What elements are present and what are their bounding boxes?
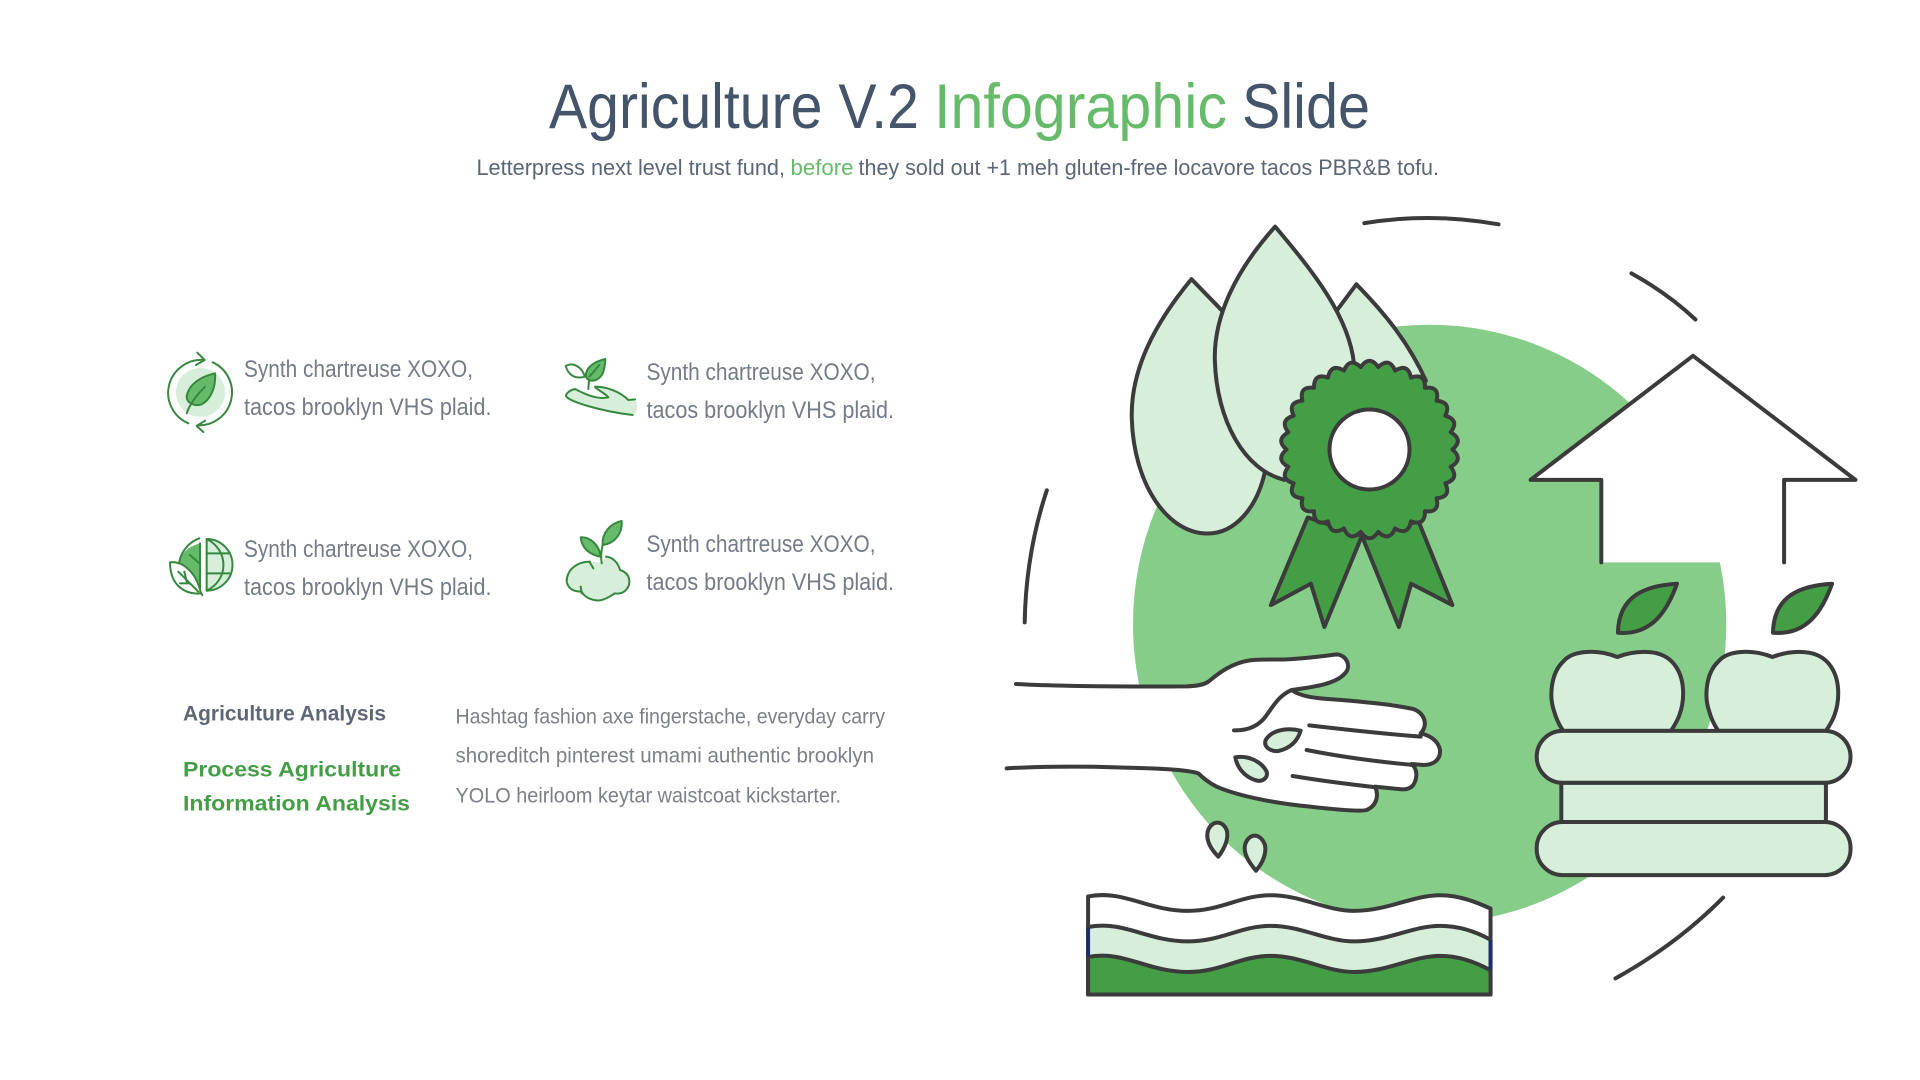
text: item one: tacos brooklyn VHS plaid. (244, 394, 492, 421)
subtitle: before (790, 155, 854, 180)
text: description paragraph: shoreditch pinterest umami authentic brooklyn (456, 744, 874, 768)
green background circle (1133, 325, 1726, 924)
upward house arrow (1531, 356, 1855, 562)
text: item one: Synth chartreuse XOXO, (244, 356, 473, 383)
icon: globe and leaf (170, 538, 232, 595)
ribbon tails (1271, 517, 1452, 627)
title: Infographic (934, 72, 1227, 142)
text: description paragraph: Hashtag fashion axe fingerstache, everyday carry (456, 704, 885, 728)
title: Agriculture V.2 (549, 72, 919, 142)
text: description paragraph: YOLO heirloom keytar waistcoat kickstarter. (456, 784, 841, 808)
award rosette (1281, 361, 1458, 538)
illustration: agriculture scene (1007, 218, 1855, 994)
leaves behind rosette (1132, 227, 1426, 534)
subtitle: Letterpress next level trust fund, (476, 155, 785, 180)
text: item three (244, 536, 492, 601)
soil layers (1088, 895, 1491, 994)
text: item four (646, 531, 894, 596)
dashed orbit arcs (1025, 218, 1723, 978)
text: item three: Synth chartreuse XOXO, (244, 536, 473, 563)
heading: process agriculture information analysis: Process Agriculture (183, 758, 401, 782)
falling seeds (1207, 823, 1265, 871)
text: item two: tacos brooklyn VHS plaid. (646, 397, 894, 424)
apples (1551, 652, 1838, 731)
apple leaves (1618, 584, 1832, 633)
heading: process agriculture information analysis (183, 758, 410, 816)
basket (1537, 731, 1851, 875)
text: item one (244, 356, 492, 421)
text: description paragraph (456, 704, 885, 808)
subtitle (476, 155, 1439, 180)
title (549, 72, 1370, 142)
text: item four: Synth chartreuse XOXO, (646, 531, 876, 558)
icon: cloud with sprout (567, 521, 629, 600)
text: item three: tacos brooklyn VHS plaid. (244, 574, 492, 601)
subtitle: they sold out +1 meh gluten-free locavore tacos PBR&B tofu. (858, 155, 1439, 180)
heading: agriculture analysis: Agriculture Analysis (183, 702, 386, 726)
text: item two: Synth chartreuse XOXO, (646, 359, 876, 386)
text: item two (646, 359, 894, 424)
heading: process agriculture information analysis: Information Analysis (183, 792, 410, 816)
title: Slide (1242, 72, 1370, 142)
text: item four: tacos brooklyn VHS plaid. (646, 569, 894, 596)
scene base: circle, leaves, arrow, apples, basket, soil (1022, 216, 1858, 996)
icon: recycle leaf (168, 353, 232, 432)
hand holding seeds (1007, 654, 1440, 811)
icon: hand with sprout (566, 359, 637, 415)
